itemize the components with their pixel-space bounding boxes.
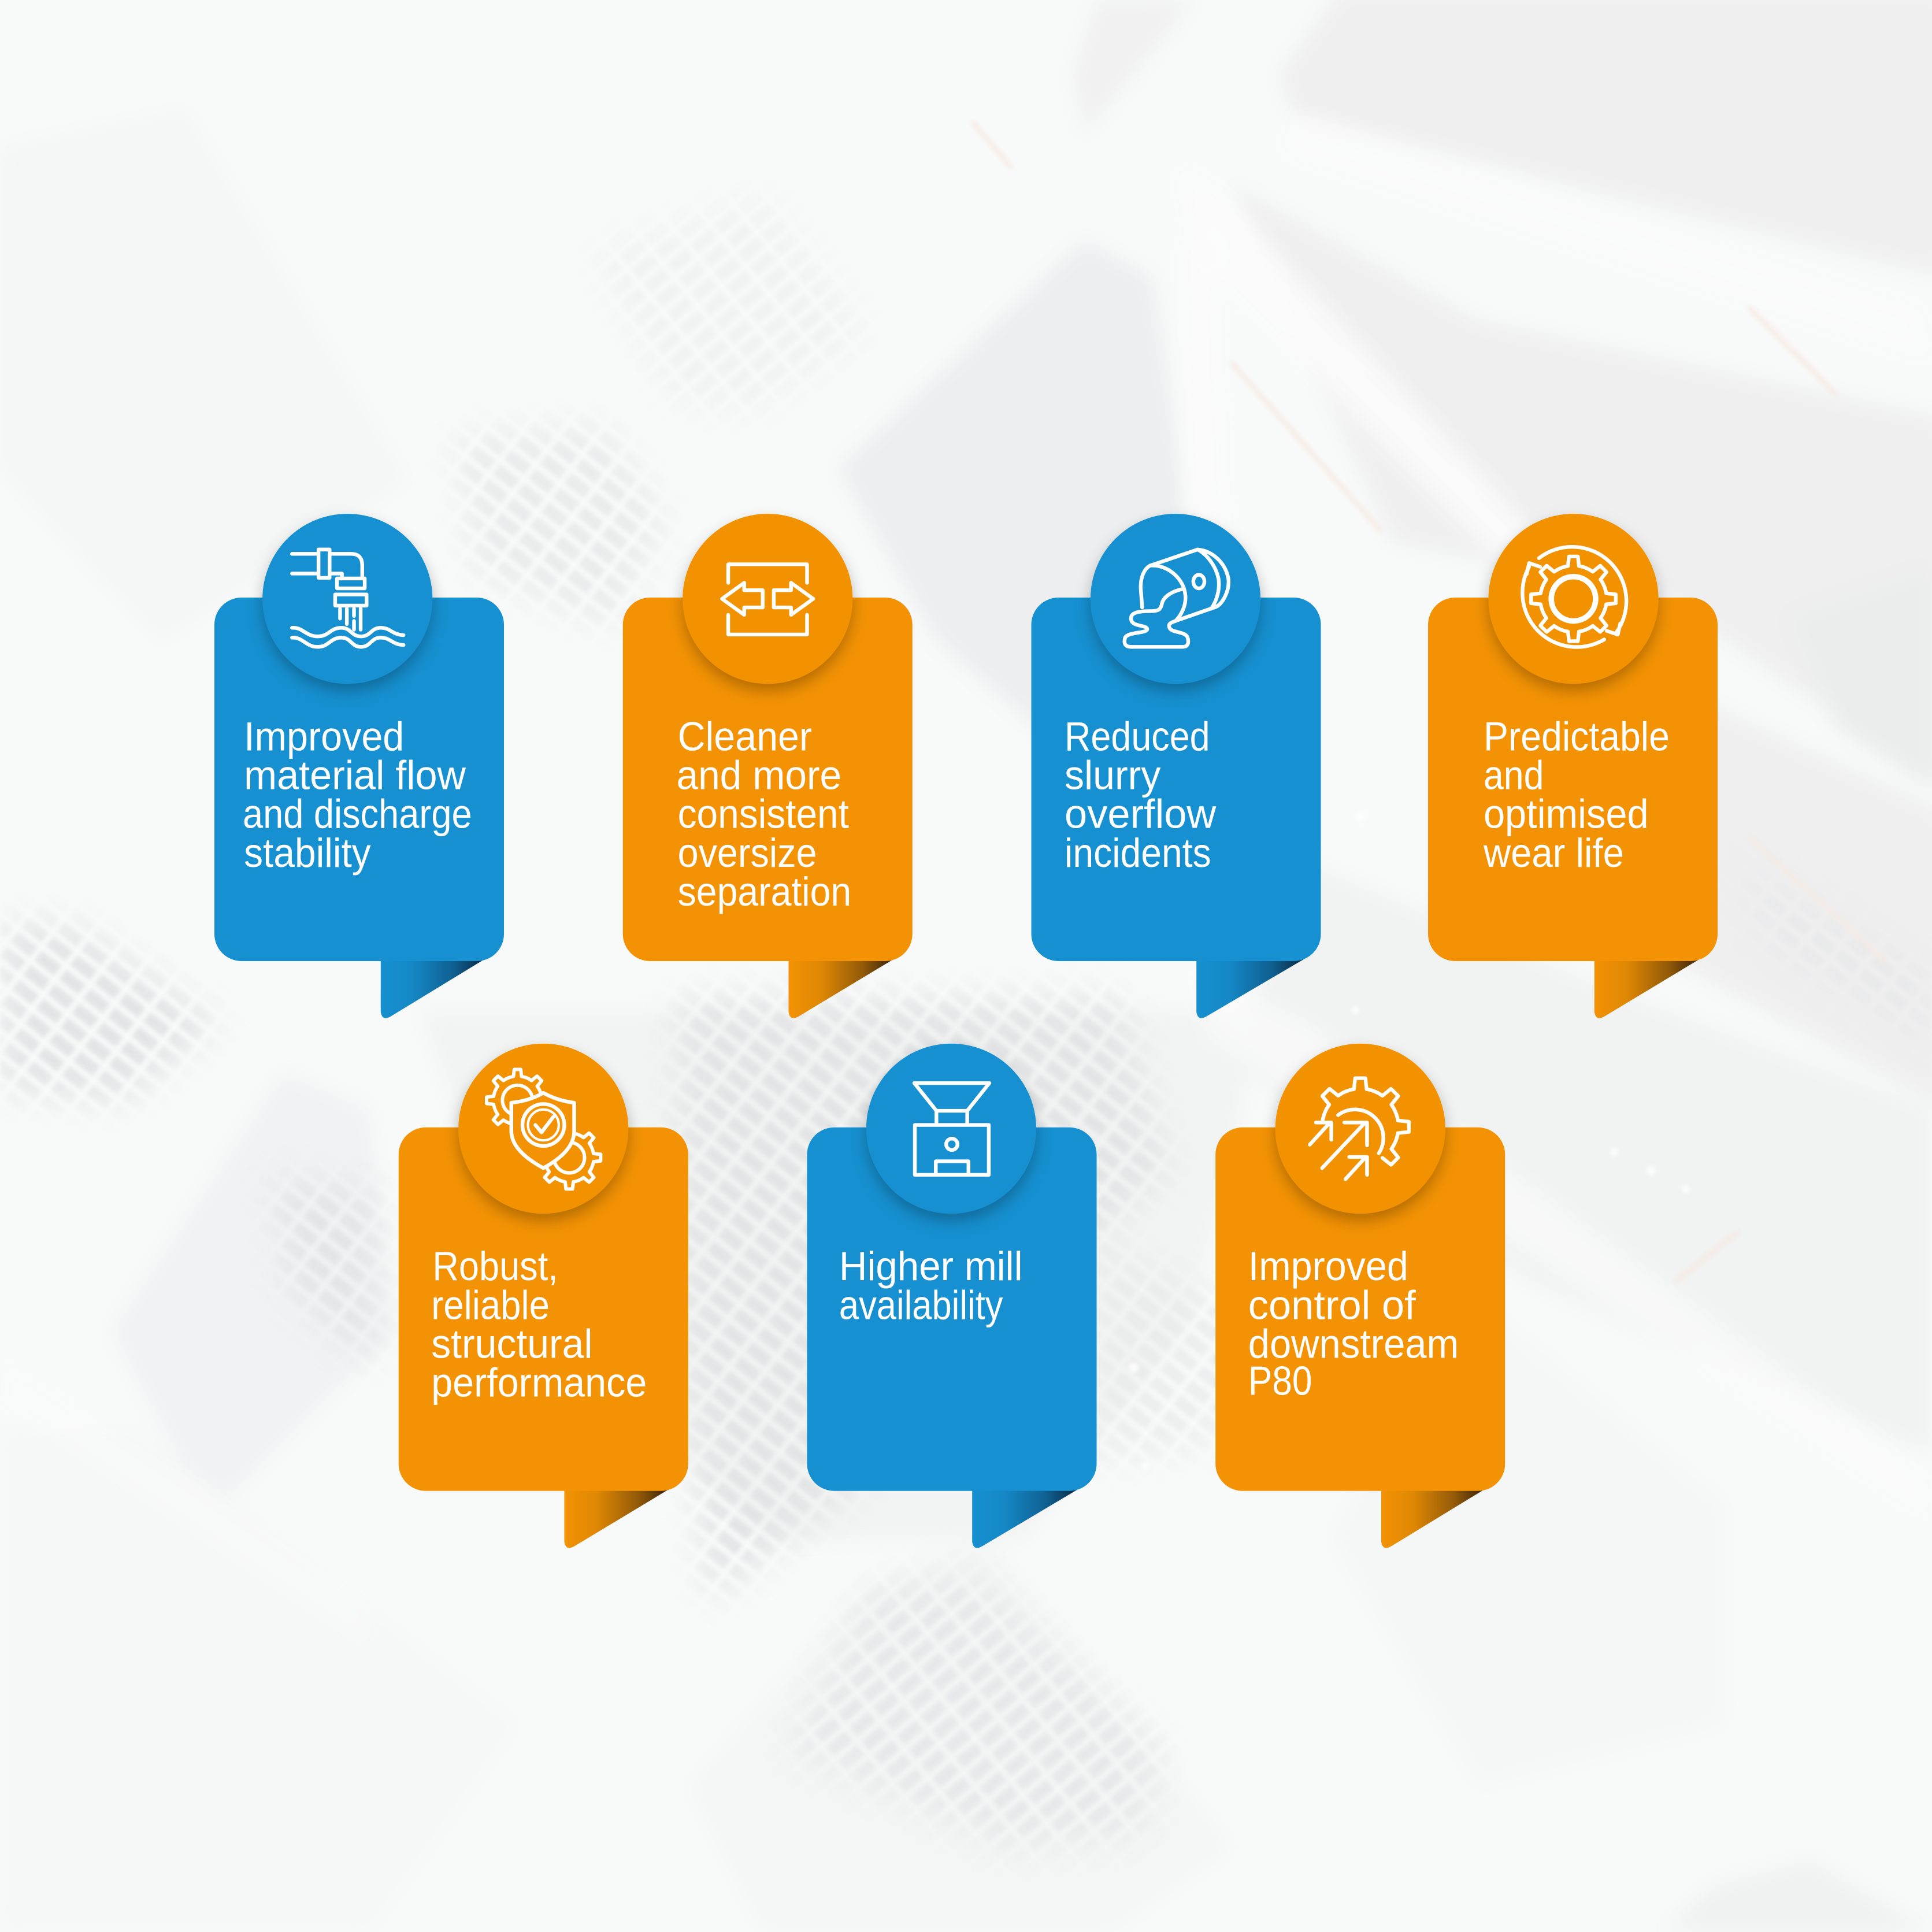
text: card 7: P80 bbox=[1248, 1358, 1312, 1403]
text: card 3: incidents bbox=[1065, 830, 1211, 876]
text: card 7: Improved bbox=[1248, 1243, 1408, 1289]
panel: robust structural performance bbox=[399, 1044, 688, 1548]
text: card 7: downstream bbox=[1248, 1321, 1459, 1366]
text: card 6: availability bbox=[839, 1282, 1003, 1327]
panel: predictable wear life bbox=[1428, 514, 1718, 1018]
text: card 7: control of bbox=[1248, 1282, 1416, 1327]
icon: pipe discharging into water bbox=[292, 550, 403, 647]
panel: higher mill availability bbox=[807, 1044, 1096, 1548]
icon: mill with feed hopper bbox=[914, 1083, 989, 1175]
icon: shield with gears and check bbox=[487, 1069, 600, 1189]
text: card 4: optimised bbox=[1484, 791, 1649, 837]
text: card 5: performance bbox=[431, 1360, 647, 1406]
text: card 4 bbox=[1483, 713, 1670, 876]
text: card 5: Robust, bbox=[432, 1243, 558, 1289]
icon: gear with cycle arrows bbox=[1522, 547, 1626, 647]
text: card 4: and bbox=[1484, 752, 1544, 798]
text: card 2: and more bbox=[676, 752, 841, 798]
panel: improved control of downstream P80 bbox=[1215, 1044, 1505, 1548]
text: card 1: and discharge bbox=[243, 791, 472, 837]
text: card 5 bbox=[431, 1243, 647, 1406]
text: card 1: Improved bbox=[244, 713, 404, 759]
text: card 1: stability bbox=[244, 830, 372, 876]
text: card 5: reliable bbox=[431, 1282, 550, 1327]
text: card 2: consistent bbox=[678, 791, 849, 837]
text: card 3 bbox=[1065, 713, 1216, 876]
text: card 7 bbox=[1248, 1243, 1459, 1403]
panel: improved material flow bbox=[214, 514, 504, 1018]
text: card 4: wear life bbox=[1483, 830, 1624, 876]
text: card 1: material flow bbox=[244, 752, 466, 798]
text: card 2: separation bbox=[678, 869, 851, 914]
text: card 3: slurry bbox=[1065, 752, 1161, 798]
icon: tipped bucket pouring slurry bbox=[1125, 550, 1229, 647]
text: card 3: Reduced bbox=[1065, 713, 1210, 759]
text: card 6: Higher mill bbox=[839, 1243, 1023, 1289]
text: card 2: Cleaner bbox=[678, 713, 812, 759]
text: card 2: oversize bbox=[678, 830, 817, 876]
panel: reduced slurry overflow bbox=[1031, 514, 1321, 1018]
text: card 1 bbox=[243, 713, 472, 876]
icon: gear with upward arrows bbox=[1310, 1078, 1409, 1179]
text: card 6 bbox=[839, 1243, 1023, 1327]
panel: cleaner oversize separation bbox=[623, 514, 913, 1018]
text: card 2 bbox=[676, 713, 851, 914]
text: card 3: overflow bbox=[1065, 791, 1216, 837]
text: card 4: Predictable bbox=[1484, 713, 1670, 759]
icon: screen with opposing arrows bbox=[722, 564, 813, 635]
text: card 5: structural bbox=[431, 1321, 592, 1366]
